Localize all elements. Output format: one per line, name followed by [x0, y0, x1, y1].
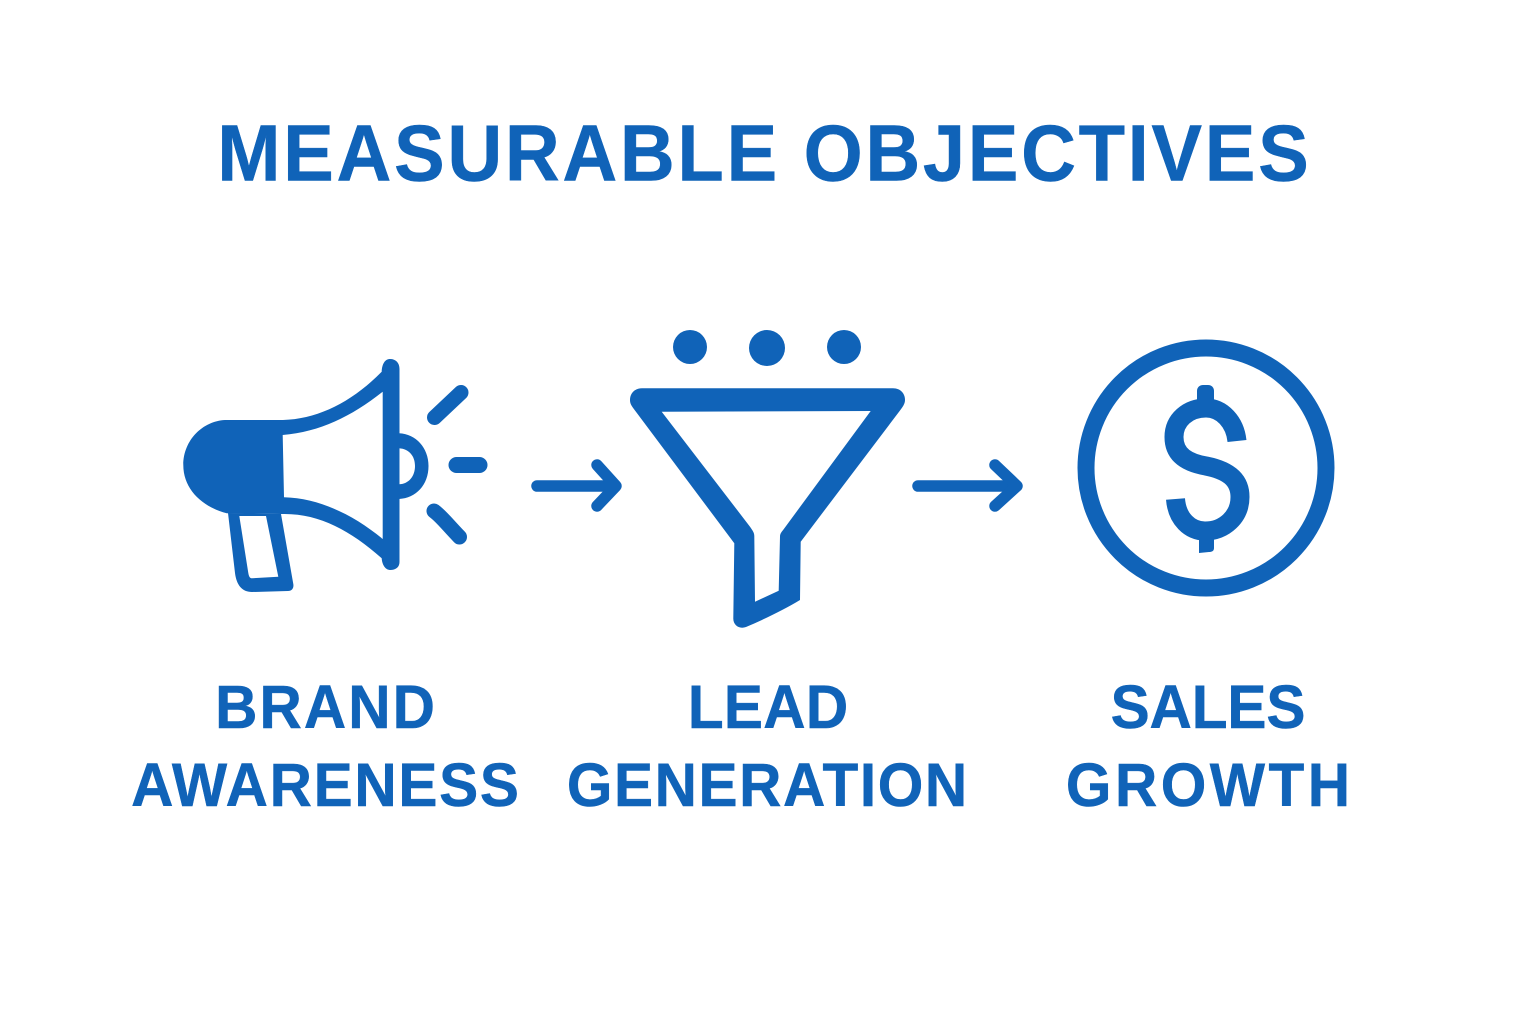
label: brand awareness: AWARENESS: [131, 751, 519, 819]
arrow: awareness to leads: [537, 465, 616, 506]
megaphone sound bump: [399, 433, 428, 499]
label: brand awareness: BRAND: [215, 673, 435, 741]
coin ring: [1086, 348, 1326, 588]
icon: funnel: [630, 330, 905, 628]
icon: megaphone: [183, 359, 480, 592]
icon: dollar coin: [1086, 348, 1326, 588]
funnel body: [630, 388, 905, 628]
label: lead generation: GENERATION: [567, 751, 967, 819]
label: brand awareness: [131, 673, 519, 819]
title: MEASURABLE OBJECTIVES: [217, 108, 1309, 198]
label: lead generation: [567, 673, 967, 819]
megaphone body: [183, 359, 400, 570]
arrow: leads to sales: [918, 465, 1017, 506]
sound rays: [434, 392, 480, 537]
label: lead generation: LEAD: [688, 673, 848, 741]
megaphone handle: [228, 513, 293, 592]
label: sales growth: GROWTH: [1066, 751, 1350, 819]
funnel dots: [673, 330, 861, 366]
dollar sign: [1174, 385, 1240, 553]
label: sales growth: SALES: [1111, 673, 1305, 741]
label: sales growth: [1066, 673, 1350, 819]
